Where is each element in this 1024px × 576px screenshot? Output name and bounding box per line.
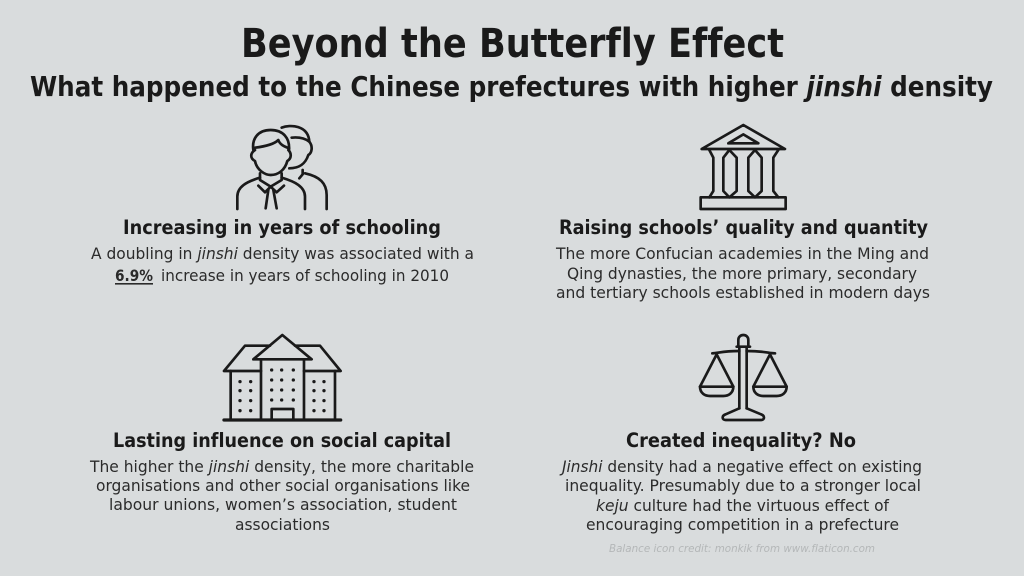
body text: 6.9% [115,267,153,285]
body text: labour unions, women’s association, student [109,496,457,514]
body text [555,245,930,302]
body text: inequality. Presumably due to a stronger local [565,477,921,495]
body text: A doubling in jinshi density was associated with a [91,245,474,263]
body text: The more Confucian academies in the Ming and [555,245,929,263]
body text: The higher the jinshi density, the more charitable [89,458,474,476]
body text: associations [235,516,330,534]
body text [559,458,922,534]
icon: classical building [701,125,786,209]
body text [89,458,474,534]
panel: inequality [559,335,922,534]
body text [91,245,474,285]
subtitle: What happened to the Chinese prefectures with higher jinshi density [30,70,993,103]
body text: keju culture had the virtuous effect of [596,497,889,515]
title: Beyond the Butterfly Effect [241,21,784,67]
icon credit: Balance icon credit: monkik from www.flaticon.com [609,543,875,555]
panel: schools quality [555,125,930,302]
body text: Jinshi density had a negative effect on existing [559,458,922,476]
body text: increase in years of schooling in 2010 [161,267,449,285]
icon: two people [237,126,327,209]
body text: organisations and other social organisations like [96,477,470,495]
icon: campus building [224,335,341,420]
heading: Increasing in years of schooling [123,216,441,239]
panel: years of schooling [91,126,474,285]
panel: social capital [89,335,474,534]
icon: balance scale [700,335,787,420]
heading: Created inequality? No [626,429,856,452]
body text: Qing dynasties, the more primary, secondary [567,265,917,283]
body text: encouraging competition in a prefecture [586,516,899,534]
body text: and tertiary schools established in modern days [556,284,930,302]
heading: Raising schools’ quality and quantity [559,216,928,239]
heading: Lasting influence on social capital [113,429,451,452]
